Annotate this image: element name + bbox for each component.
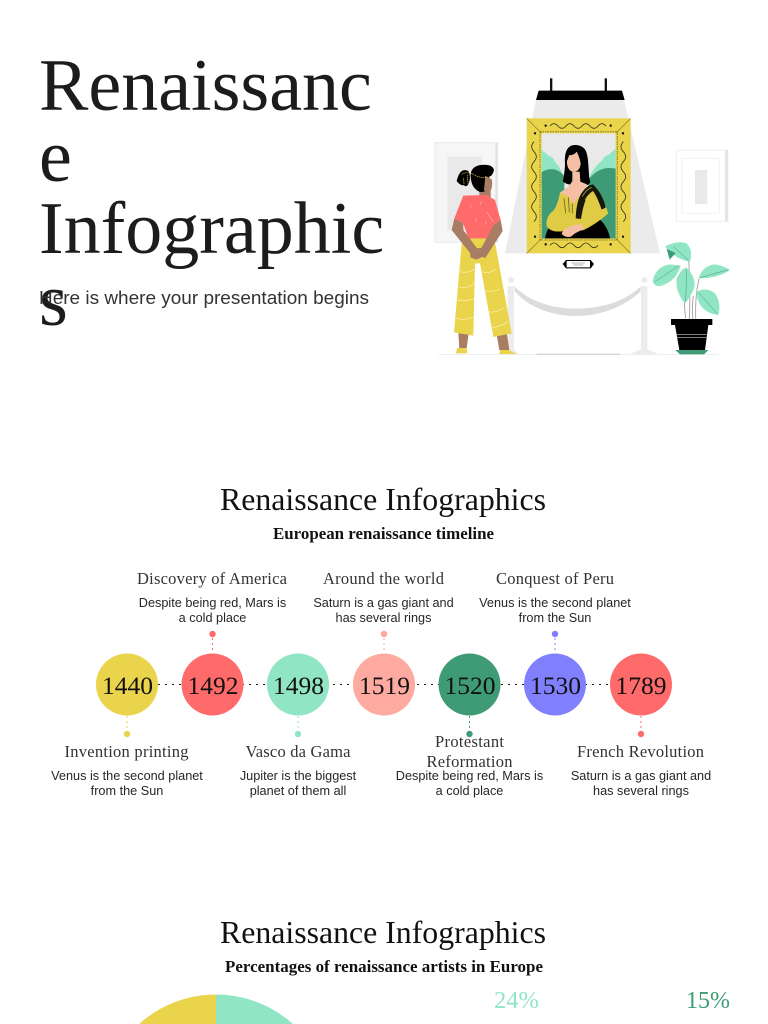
icon: potted plant xyxy=(653,242,730,354)
percentage: 15%: 15% xyxy=(686,987,730,1014)
timeline item: 1530 Conquest of Peru: Conquest of Peru xyxy=(496,569,614,588)
icon: right wall painting xyxy=(676,150,728,221)
icon: plaque xyxy=(563,260,594,268)
timeline item: 1520 Protestant Reformation xyxy=(396,654,543,798)
ground line xyxy=(438,353,718,356)
timeline item: 1492 Discovery of America xyxy=(137,569,288,716)
illustration: museum visitor viewing painting xyxy=(435,78,730,355)
title xyxy=(39,45,384,342)
timeline item: 1440 Invention printing: Venus is the second planet xyxy=(51,769,203,783)
percentage: 24%: 24% xyxy=(494,987,539,1014)
title: Renaissanc xyxy=(39,45,372,127)
timeline item: 1520 Protestant Reformation: Protestant xyxy=(435,732,504,751)
timeline item: 1519 Around the world: 1519 xyxy=(359,671,410,700)
timeline item: 1498 Vasco da Gama xyxy=(240,654,357,798)
icon: woman from behind xyxy=(452,165,516,354)
subheading: percentages: Percentages of renaissance artists in Europe xyxy=(225,957,543,976)
timeline item: 1440 Invention printing: from the Sun xyxy=(91,784,163,798)
timeline item: 1498 Vasco da Gama: Jupiter is the biggest xyxy=(240,769,357,783)
timeline item: 1492 Discovery of America: Despite being red, Mars is xyxy=(139,596,286,610)
timeline item: 1520 Protestant Reformation: 1520 xyxy=(444,671,496,700)
timeline item: 1789 French Revolution: has several rings xyxy=(593,784,689,798)
timeline item: 1519 Around the world xyxy=(313,569,454,716)
icon: light cone xyxy=(505,100,660,253)
title: e xyxy=(39,116,72,198)
heading: percentages section: Renaissance Infographics xyxy=(220,914,546,950)
title: s xyxy=(39,260,68,342)
subtitle: Here is where your presentation begins xyxy=(39,287,369,308)
timeline item: 1498 Vasco da Gama: Vasco da Gama xyxy=(246,742,351,761)
timeline item: 1520 Protestant Reformation: a cold place xyxy=(436,784,503,798)
timeline item: 1520 Protestant Reformation: Reformation xyxy=(426,752,512,771)
timeline item: 1530 Conquest of Peru: 1530 xyxy=(530,671,581,700)
timeline item: 1789 French Revolution: 1789 xyxy=(616,671,666,700)
icon: left wall painting xyxy=(435,143,498,242)
heading: timeline section: Renaissance Infographics xyxy=(220,481,546,517)
timeline item: 1519 Around the world: has several rings xyxy=(336,611,431,625)
icon: golden frame with portrait xyxy=(527,118,631,253)
icon: rope barrier xyxy=(503,277,658,354)
pie chart xyxy=(139,994,293,1024)
timeline item: 1498 Vasco da Gama: planet of them all xyxy=(250,784,346,798)
timeline item: 1492 Discovery of America: 1492 xyxy=(188,671,238,700)
subheading: timeline: European renaissance timeline xyxy=(273,524,494,543)
timeline connector xyxy=(158,684,610,686)
timeline item: 1492 Discovery of America: Discovery of America xyxy=(137,569,288,588)
timeline item: 1530 Conquest of Peru: from the Sun xyxy=(519,611,591,625)
timeline item: 1789 French Revolution xyxy=(571,654,711,798)
timeline item: 1492 Discovery of America: a cold place xyxy=(179,611,246,625)
timeline item: 1440 Invention printing: 1440 xyxy=(102,671,153,700)
timeline item: 1530 Conquest of Peru: Venus is the second planet xyxy=(479,596,631,610)
icon: picture lamp xyxy=(536,78,625,100)
timeline item: 1498 Vasco da Gama: 1498 xyxy=(273,671,324,700)
timeline item: 1789 French Revolution: Saturn is a gas giant and xyxy=(571,769,711,783)
timeline item: 1440 Invention printing: Invention printing xyxy=(64,742,188,761)
timeline item: 1520 Protestant Reformation: Despite being red, Mars is xyxy=(396,769,543,783)
title: Infographic xyxy=(39,188,384,270)
timeline item: 1440 Invention printing xyxy=(51,654,203,798)
timeline item: 1519 Around the world: Around the world xyxy=(323,569,445,588)
timeline item: 1530 Conquest of Peru xyxy=(479,569,631,716)
timeline item: 1519 Around the world: Saturn is a gas giant and xyxy=(313,596,454,610)
timeline item: 1789 French Revolution: French Revolution xyxy=(577,742,704,761)
